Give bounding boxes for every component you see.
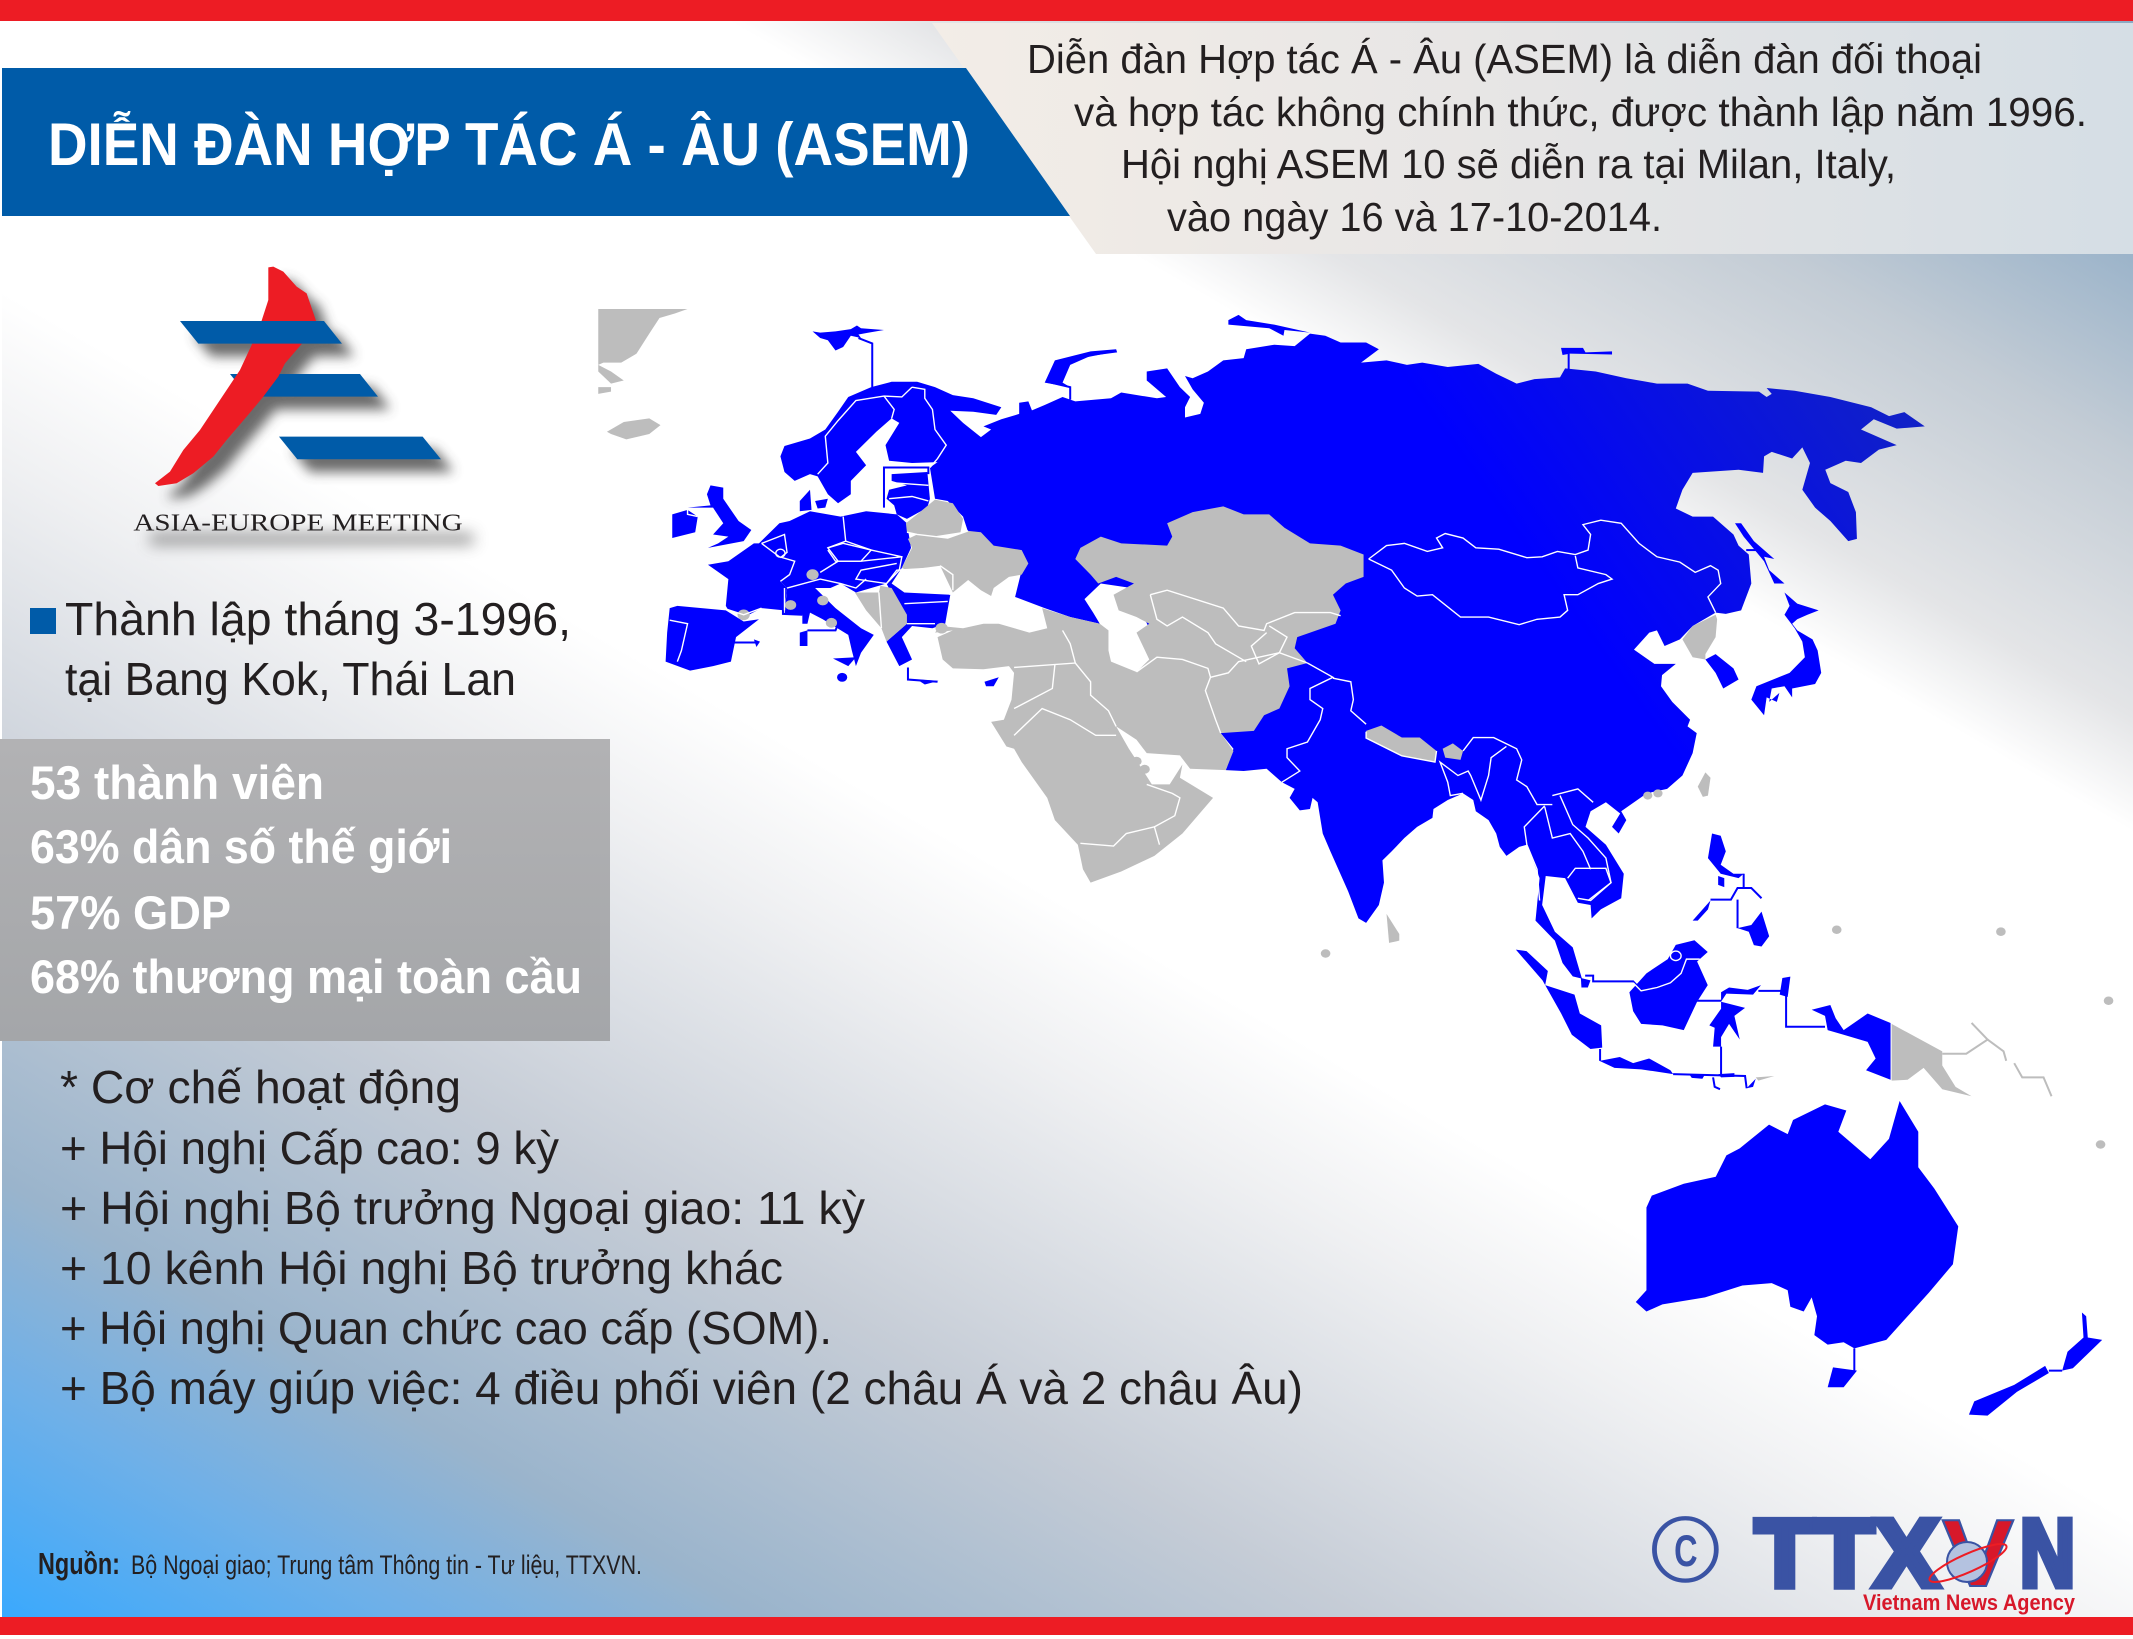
TTXVN logo: Vietnam News Agency [1863, 1590, 2076, 1615]
map: Eurasia members and non-members [598, 309, 1925, 979]
source line [38, 1546, 642, 1581]
small island dots [1321, 926, 2113, 1149]
operating mechanism list: + Bộ máy giúp việc: 4 điều phối viên (2 châu Á và 2 châu Âu) [60, 1362, 1303, 1414]
Western and Central Europe (members) [666, 467, 999, 686]
intro text: Diễn đàn Hợp tác Á - Âu (ASEM) là diễn đàn đối thoại [1027, 36, 1982, 82]
Sakhalin [1561, 348, 1784, 584]
intro text: Hội nghị ASEM 10 sẽ diễn ra tại Milan, Italy, [1121, 141, 1896, 187]
bottom red bar [0, 1617, 2133, 1635]
top red bar [0, 0, 2133, 21]
Eastern Europe, Central Asia and Middle East (non-member) [738, 500, 1364, 883]
panel: key statistics: 53 thành viên [30, 756, 324, 809]
title: DIỄN ĐÀN HỢP TÁC Á - ÂU (ASEM) [48, 111, 970, 178]
Japan [1751, 592, 1821, 715]
New Zealand [1969, 1312, 2102, 1416]
East Asia group [1333, 348, 1821, 946]
TTXVN logo [1755, 1500, 2076, 1615]
copyright symbol [1654, 1518, 1716, 1581]
operating mechanism list: + Hội nghị Bộ trưởng Ngoại giao: 11 kỳ [60, 1182, 865, 1234]
Svalbard and connector [813, 315, 1310, 400]
title banner [2, 68, 1070, 216]
Russia, China, India, Southeast Asia and Scandinavia landmass [780, 334, 1925, 979]
intro panel [932, 23, 2133, 254]
founding note: Thành lập tháng 3-1996, [65, 593, 571, 645]
panel: key statistics: 63% dân số thế giới [30, 820, 452, 873]
Greenland and Iceland (non-member) [598, 309, 688, 439]
ASEM logo [133, 267, 473, 545]
operating mechanism list [60, 1061, 1303, 1414]
copyright symbol: C [1674, 1527, 1698, 1576]
map: Southeast Asia and Oceania [1321, 926, 2113, 1581]
national borders [670, 387, 1341, 846]
TTXVN logo: N [2020, 1500, 2075, 1607]
operating mechanism list: + 10 kênh Hội nghị Bộ trưởng khác [60, 1242, 783, 1294]
operating mechanism list: * Cơ chế hoạt động [60, 1061, 461, 1113]
panel: key statistics: 68% thương mại toàn cầu [30, 950, 582, 1003]
Indonesia and Borneo [1516, 940, 1891, 1089]
Papua New Guinea and Timor (non-member) [1756, 1023, 2052, 1096]
Nepal, Bhutan, Taiwan, Sri Lanka and small islands [1366, 726, 1711, 943]
intro text: vào ngày 16 và 17-10-2014. [1167, 194, 1662, 240]
panel: key statistics: 57% GDP [30, 886, 231, 939]
icon: blue square bullet [30, 608, 56, 634]
ASEM logo: ASIA-EUROPE MEETING [133, 510, 463, 536]
intro text [1027, 36, 2087, 240]
Borneo borders [1633, 951, 1700, 991]
source line: Bộ Ngoại giao; Trung tâm Thông tin - Tư liệu, TTXVN. [131, 1550, 642, 1580]
Philippines [1693, 834, 1769, 946]
operating mechanism list: + Hội nghị Quan chức cao cấp (SOM). [60, 1302, 832, 1354]
intro text: và hợp tác không chính thức, được thành lập năm 1996. [1074, 89, 2087, 135]
TTXVN logo: V [1942, 1500, 2014, 1607]
panel: key statistics [0, 739, 610, 1041]
TTXVN logo: TTX [1755, 1500, 1939, 1607]
founding note [30, 593, 571, 705]
icon: globe with orbit [1926, 1538, 2010, 1588]
Korea: DPRK non-member, ROK member [1682, 615, 1717, 659]
Australia [1636, 1101, 1958, 1387]
founding note: tại Bang Kok, Thái Lan [65, 653, 516, 705]
source line: Nguồn: [38, 1546, 120, 1581]
China, Mongolia, India, Indochina borders [1333, 520, 1721, 900]
operating mechanism list: + Hội nghị Cấp cao: 9 kỳ [60, 1122, 559, 1174]
